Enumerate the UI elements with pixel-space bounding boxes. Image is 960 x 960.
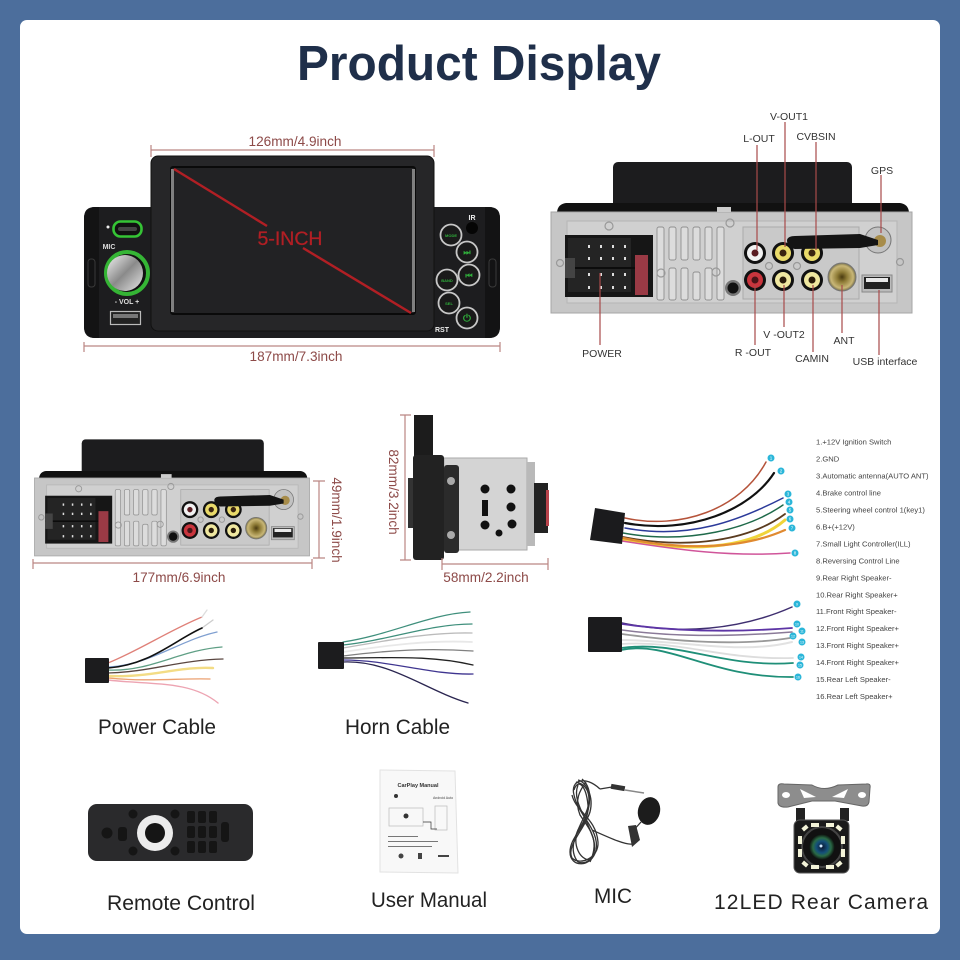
port labels	[582, 111, 918, 368]
number markers: 15	[798, 663, 802, 667]
width dimension 177mm: 177mm/6.9inch	[133, 570, 225, 585]
scaled rear unit	[34, 439, 310, 556]
button labels: ⏻	[463, 312, 471, 324]
button labels: ⏮	[465, 271, 473, 280]
left and right end caps	[84, 207, 500, 338]
user manual illustration	[380, 770, 458, 873]
number markers: 13	[800, 640, 804, 644]
wire function list: 7.Small Light Controller(ILL)	[816, 540, 911, 548]
remote control illustration	[88, 804, 253, 861]
port labels: GPS	[871, 165, 893, 177]
wire function list: 5.Steering wheel control 1(key1)	[816, 506, 925, 514]
port labels: L-OUT	[743, 133, 775, 145]
port labels: USB interface	[853, 356, 918, 368]
number markers: 14	[799, 655, 803, 659]
depth dimension 58mm	[442, 558, 548, 585]
port labels: R -OUT	[735, 347, 772, 359]
diagonal measure line	[174, 169, 411, 313]
IR sensor	[466, 222, 478, 234]
wire function list: 11.Front Right Speaker-	[816, 607, 897, 616]
wire function list: 6.B+(+12V)	[816, 522, 855, 532]
power cable illustration	[85, 610, 223, 703]
control buttons	[436, 224, 480, 328]
USB port	[110, 312, 140, 324]
port leader lines	[600, 122, 881, 355]
rear view with dimensions	[33, 439, 344, 585]
button labels: BAND	[441, 278, 453, 283]
width dimension 126mm: 126mm/4.9inch	[249, 134, 341, 149]
wiring diagram: speaker harness	[588, 600, 806, 680]
button labels	[441, 233, 473, 324]
side unit drawing	[408, 415, 549, 560]
front view of radio with dimensions	[84, 134, 500, 364]
user manual illustration: Android Auto	[433, 796, 453, 800]
port labels: V -OUT2	[763, 329, 805, 341]
screen bevel highlights	[171, 169, 415, 312]
green power pill port	[106, 222, 142, 236]
number markers: 9	[796, 602, 798, 606]
port labels: V-OUT1	[770, 111, 808, 123]
wire function list: 1.+12V Ignition Switch	[816, 438, 891, 446]
wire function list: 12.Front Right Speaker+	[816, 624, 900, 633]
volume knob	[106, 252, 148, 294]
button labels: ⏭	[463, 248, 471, 257]
connector	[590, 508, 625, 544]
horn cable illustration	[318, 612, 473, 703]
width dimension 126mm	[151, 134, 434, 157]
number markers: 6	[789, 517, 792, 522]
number markers: 5	[789, 508, 792, 513]
width dimension 187mm	[84, 342, 500, 364]
rear view of radio with port labels	[551, 111, 918, 368]
number markers: 7	[791, 526, 794, 531]
wire function list: 2.GND	[816, 454, 840, 464]
wire function list: 10.Rear Right Speaker+	[816, 590, 898, 600]
wiring diagram: power harness	[590, 454, 798, 556]
wire function list: 16.Rear Left Speaker+	[816, 692, 893, 701]
wire function list: 4.Brake control line	[816, 488, 881, 498]
wire function list: 15.Rear Left Speaker-	[816, 675, 891, 684]
number markers: 3	[787, 492, 790, 497]
side view with dimensions	[386, 415, 549, 585]
wire function list: 13.Front Right Speaker+	[816, 641, 900, 650]
number markers: 16	[796, 675, 800, 679]
power cable caption: Power Cable	[98, 716, 216, 739]
wire function list: 8.Reversing Control Line	[816, 556, 900, 566]
button labels: MODE	[445, 233, 457, 238]
width dimension 177mm	[33, 559, 312, 585]
port labels: CVBSIN	[796, 131, 836, 143]
number markers	[790, 600, 806, 680]
rear camera illustration	[778, 784, 870, 873]
number markers: 1	[770, 456, 773, 461]
height dimension 49mm: 49mm/1.9inch	[329, 477, 344, 563]
user manual illustration: CarPlay Manual	[398, 783, 439, 789]
height dimension 49mm	[313, 477, 344, 563]
depth dimension 58mm: 58mm/2.2inch	[443, 570, 529, 585]
numbered wires 9 to 16	[621, 607, 793, 677]
MIC label: MIC	[103, 244, 115, 251]
connector	[588, 617, 622, 652]
screen	[171, 167, 415, 314]
wire function list	[816, 438, 929, 701]
height dimension 82mm	[386, 415, 411, 560]
number markers: 12	[791, 634, 795, 638]
width dimension 187mm: 187mm/7.3inch	[250, 349, 342, 364]
wire function list: 9.Rear Right Speaker-	[816, 574, 892, 582]
button labels: SEL	[445, 301, 453, 306]
port labels: POWER	[582, 348, 622, 360]
radio base body	[84, 207, 500, 338]
title: Product Display	[297, 36, 661, 91]
horn cable caption: Horn Cable	[345, 716, 450, 739]
rear unit drawing	[551, 162, 912, 313]
port labels: CAMIN	[795, 353, 829, 365]
number markers: 10	[795, 622, 799, 626]
wire function list: 14.Front Right Speaker+	[816, 658, 900, 667]
volume label: - VOL +	[115, 299, 139, 306]
IR label: IR	[468, 215, 476, 222]
number markers	[768, 454, 798, 556]
number markers: 11	[800, 629, 804, 633]
RST label: RST	[435, 327, 450, 334]
rear camera caption: 12LED Rear Camera	[714, 891, 928, 914]
screen housing	[151, 156, 434, 331]
microphone illustration	[570, 779, 663, 864]
port labels: ANT	[834, 335, 855, 347]
number markers: 2	[780, 469, 783, 474]
wire function list: 3.Automatic antenna(AUTO ANT)	[816, 472, 929, 480]
height dimension 82mm: 82mm/3.2inch	[386, 449, 401, 535]
numbered wires 1 to 8	[622, 462, 790, 554]
screen size label: 5-INCH	[257, 228, 323, 250]
mic caption: MIC	[594, 885, 632, 908]
user manual caption: User Manual	[371, 889, 487, 912]
remote control caption: Remote Control	[107, 892, 255, 915]
number markers: 8	[794, 551, 797, 556]
number markers: 4	[788, 500, 791, 505]
